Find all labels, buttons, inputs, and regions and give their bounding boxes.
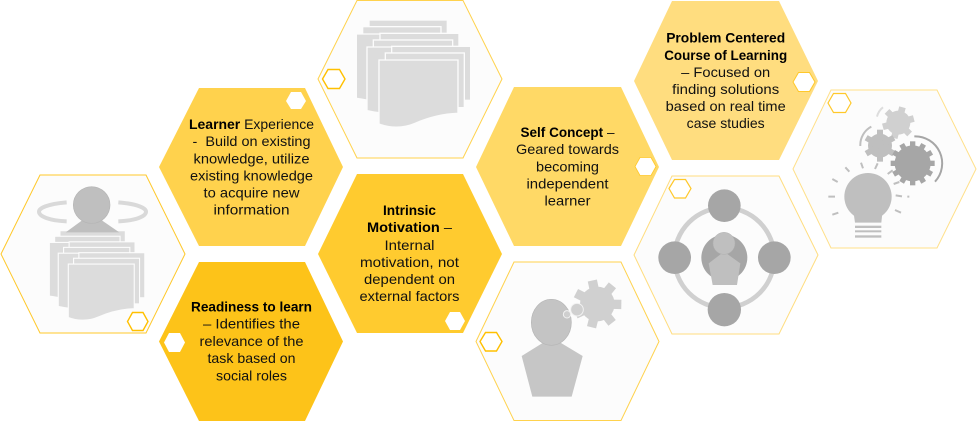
icon: small hexagon marker — [164, 333, 185, 352]
text: intrinsic motivation: Internal — [384, 237, 434, 253]
icon: small hexagon marker — [445, 312, 465, 330]
text: intrinsic motivation: Intrinsic — [383, 202, 436, 218]
text: readiness to learn: task based on — [208, 350, 296, 366]
text: problem centered — [664, 30, 787, 131]
icon: person with orbit and documents — [39, 187, 146, 320]
text: learner experience — [189, 116, 314, 218]
panel: problem centered course of learning — [634, 1, 818, 160]
text: intrinsic motivation: external factors — [360, 288, 460, 304]
text: self concept: becoming — [536, 158, 599, 174]
text: intrinsic motivation: Motivation – — [367, 219, 452, 235]
text: learner experience: - Build on existing — [192, 133, 310, 149]
text: problem centered: finding solutions — [672, 81, 779, 97]
text: problem centered: Problem Centered — [666, 30, 785, 46]
text: readiness to learn: social roles — [216, 368, 287, 384]
icon: small hexagon marker — [635, 158, 656, 176]
icon: small hexagon marker — [286, 92, 306, 109]
panel: readiness to learn — [159, 262, 343, 421]
icon: small hexagon marker — [480, 332, 502, 351]
text: readiness to learn: relevance of the — [200, 333, 304, 349]
icon: small hexagon marker — [793, 72, 815, 92]
icon: small hexagon marker — [128, 312, 148, 330]
text: intrinsic motivation: motivation, not — [360, 254, 459, 270]
panel: self concept — [476, 87, 659, 246]
panel: person with documents — [1, 175, 185, 333]
text: learner experience: knowledge, utilize — [194, 150, 310, 166]
text: learner experience: existing knowledge — [190, 168, 313, 184]
text: readiness to learn — [191, 298, 312, 384]
panel: thinking person — [476, 262, 659, 420]
text: readiness to learn: – Identifies the — [203, 316, 300, 332]
text: readiness to learn: Readiness to learn — [191, 298, 312, 314]
icon: small hexagon marker — [828, 94, 851, 112]
panel: intrinsic motivation — [318, 174, 502, 333]
icon: person with thought gear — [522, 280, 621, 397]
text: self concept — [516, 124, 619, 208]
text: intrinsic motivation: dependent on — [364, 271, 455, 287]
text: learner experience: Learner Experience — [189, 116, 314, 132]
text: self concept: learner — [544, 192, 591, 208]
text: self concept: independent — [526, 176, 609, 192]
icon: lightbulb with gears — [828, 106, 942, 238]
text: problem centered: Course of Learning — [664, 47, 787, 63]
icon: small hexagon marker — [669, 180, 691, 198]
text: learner experience: to acquire new — [204, 184, 300, 200]
icon: document stack — [356, 20, 471, 127]
text: intrinsic motivation — [360, 202, 460, 304]
text: self concept: Self Concept – — [520, 124, 615, 140]
panel: lightbulb and gears — [793, 90, 976, 248]
icon: person in connected ring — [658, 189, 791, 326]
text: problem centered: – Focused on — [681, 64, 770, 80]
icon: small hexagon marker — [322, 70, 345, 88]
text: problem centered: case studies — [687, 115, 765, 131]
panel: learner experience — [159, 88, 343, 246]
panel: network — [634, 176, 818, 334]
text: problem centered: based on real time — [666, 98, 786, 114]
panel: documents — [318, 0, 502, 158]
text: learner experience: information — [214, 202, 290, 218]
text: self concept: Geared towards — [516, 141, 619, 157]
